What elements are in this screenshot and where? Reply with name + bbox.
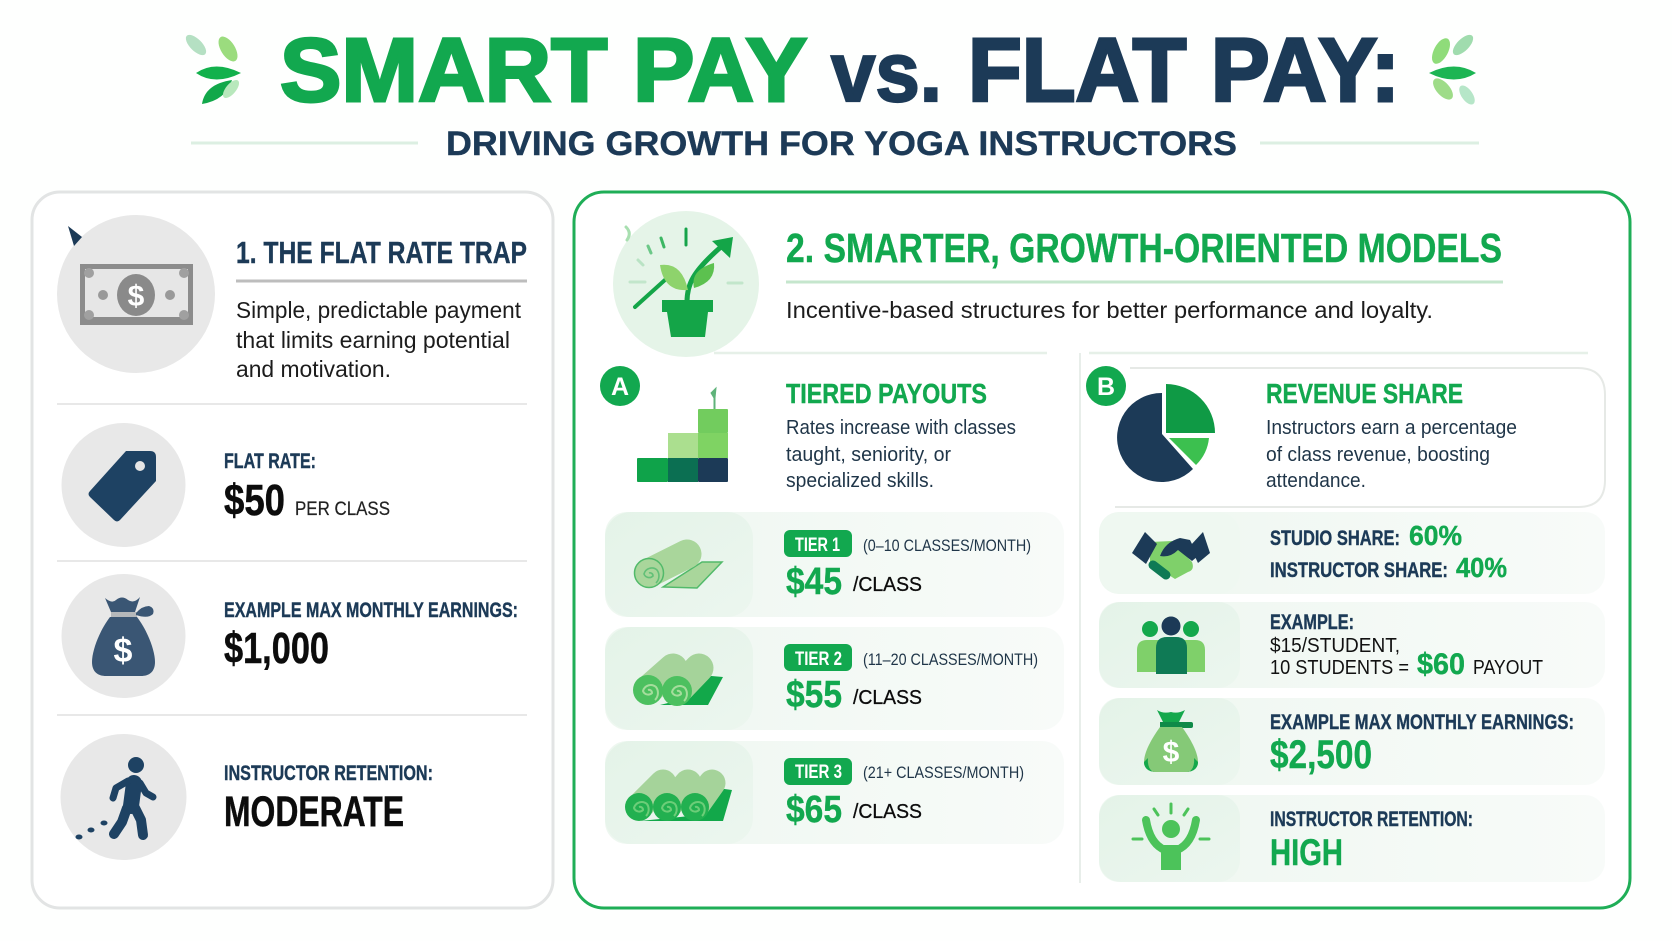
text: revenue share description: Instructors earn a percentage [1266, 417, 1517, 439]
title: SMART PAY [280, 21, 807, 121]
text: revenue share description: of class revenue, boosting [1266, 444, 1490, 466]
heading: revenue share: REVENUE SHARE [1266, 378, 1463, 409]
row: tier 3 [605, 741, 1064, 844]
stat: revenue earnings text: EXAMPLE MAX MONTHLY EARNINGS: [1270, 711, 1574, 734]
stat: payout example text: $60 [1417, 648, 1465, 681]
tier 1 rate: /CLASS [853, 574, 922, 596]
heading: tiered payouts: TIERED PAYOUTS [786, 378, 987, 409]
heading: flat rate trap: 1. THE FLAT RATE TRAP [236, 235, 527, 270]
icon: green money bag [1144, 710, 1198, 772]
stat: max monthly earnings: EXAMPLE MAX MONTHLY EARNINGS: [224, 599, 518, 622]
stat: payout example text: $15/STUDENT, [1270, 635, 1400, 657]
row: retention high [1099, 795, 1605, 882]
text: revenue share description [1266, 417, 1517, 492]
row: payout example [1099, 602, 1605, 688]
icon: single mat roll [634, 554, 722, 588]
tier 3 rate: /CLASS [853, 801, 922, 823]
stat: flat rate [224, 450, 390, 525]
stat: retention high text: INSTRUCTOR RETENTION: [1270, 808, 1473, 831]
icon: three people [1137, 616, 1205, 674]
tier 3 badge: TIER 3 [795, 762, 842, 783]
icon: three mat rolls [625, 783, 732, 821]
badge: B: B [1097, 373, 1115, 401]
stat: payout example text: 10 STUDENTS = [1270, 657, 1409, 679]
icon: handshake [1132, 532, 1210, 579]
row: tier 1 [605, 512, 1064, 617]
tier 2 rate: /CLASS [853, 687, 922, 709]
stat: flat rate: PER CLASS [295, 499, 390, 520]
stat: instructor retention moderate: INSTRUCTOR RETENTION: [224, 762, 433, 785]
tier 1 rate: $45 [786, 561, 842, 603]
title [280, 21, 1400, 121]
tier 3 rate [786, 789, 922, 831]
title: vs. [831, 25, 942, 119]
icon: green money bag: $ [1163, 736, 1180, 769]
stat: payout example text [1270, 611, 1543, 681]
tier 2 badge [784, 644, 852, 671]
tier 1 rate [786, 561, 922, 603]
stat: max monthly earnings: $1,000 [224, 624, 329, 673]
tier 1 badge [784, 530, 852, 557]
text: tiered description: specialized skills. [786, 470, 934, 492]
stat: flat rate: FLAT RATE: [224, 450, 316, 473]
icon: stairs chart [637, 388, 728, 482]
stat: revenue earnings text [1270, 711, 1574, 777]
stat: flat rate: $50 [224, 476, 285, 525]
text: flat rate description: and motivation. [236, 356, 391, 382]
stat: retention high text [1270, 808, 1473, 873]
heading: smarter models: 2. SMARTER, GROWTH-ORIENTED MODELS [786, 225, 1502, 271]
icon: right leaves [1428, 32, 1478, 107]
panel: smarter models [574, 192, 1630, 908]
stat: share split text: STUDIO SHARE: [1270, 527, 1400, 550]
icon: cash bill [57, 215, 215, 373]
row: revenue earnings [1099, 698, 1605, 785]
icon: price tag [62, 423, 186, 547]
panel: flat rate trap [32, 192, 553, 908]
tier 2 badge: TIER 2 [795, 649, 842, 670]
text: tiered description: taught, seniority, or [786, 444, 951, 466]
tier 2 rate [786, 674, 922, 716]
text: flat rate description: that limits earning potential [236, 327, 510, 353]
row: tier 1: (0–10 CLASSES/MONTH) [863, 536, 1031, 555]
text: flat rate description: Simple, predictable payment [236, 297, 522, 323]
row: tier 2: (11–20 CLASSES/MONTH) [863, 650, 1038, 669]
tier 2 rate: $55 [786, 674, 842, 716]
text: tiered description [786, 417, 1016, 492]
row: tier 3: (21+ CLASSES/MONTH) [863, 763, 1024, 782]
subtitle: DRIVING GROWTH FOR YOGA INSTRUCTORS [446, 125, 1237, 163]
tier 1 badge: TIER 1 [795, 535, 840, 556]
text: flat rate description [236, 297, 522, 382]
stat: share split text: 60% [1409, 520, 1462, 551]
stat: max monthly earnings [224, 599, 518, 673]
badge: B [1086, 366, 1126, 406]
title: FLAT PAY: [968, 21, 1400, 121]
row: share split [1099, 512, 1605, 594]
icon: person walking away [60, 734, 186, 860]
icon: pie chart [1117, 384, 1215, 482]
stat: payout example text: PAYOUT [1473, 657, 1543, 679]
header [183, 21, 1479, 163]
icon: growth plant [613, 211, 759, 357]
text: models description: Incentive-based structures for better performance and loyalty. [786, 297, 1433, 323]
stat: revenue earnings text: $2,500 [1270, 733, 1372, 777]
stat: instructor retention moderate: MODERATE [224, 788, 404, 836]
icon: cheering person [1133, 804, 1209, 870]
icon: two mat rolls [633, 668, 723, 706]
icon: money bag: $ [114, 632, 133, 670]
text: tiered description: Rates increase with classes [786, 417, 1016, 439]
stat: payout example text: EXAMPLE: [1270, 611, 1354, 634]
icon: left leaves [183, 32, 242, 104]
tier 3 rate: $65 [786, 789, 842, 831]
badge: A: A [611, 373, 629, 401]
stat: share split text: INSTRUCTOR SHARE: [1270, 559, 1448, 582]
stat: share split text [1270, 520, 1507, 583]
icon: money bag [62, 574, 186, 698]
text: revenue share description: attendance. [1266, 470, 1366, 492]
tier 3 badge [784, 758, 852, 785]
badge: A [600, 366, 640, 406]
icon: cash bill: $ [128, 280, 145, 313]
stat: retention high text: HIGH [1270, 832, 1343, 873]
row: tier 2 [605, 627, 1064, 730]
stat: instructor retention moderate [224, 762, 433, 836]
stat: share split text: 40% [1456, 552, 1507, 583]
